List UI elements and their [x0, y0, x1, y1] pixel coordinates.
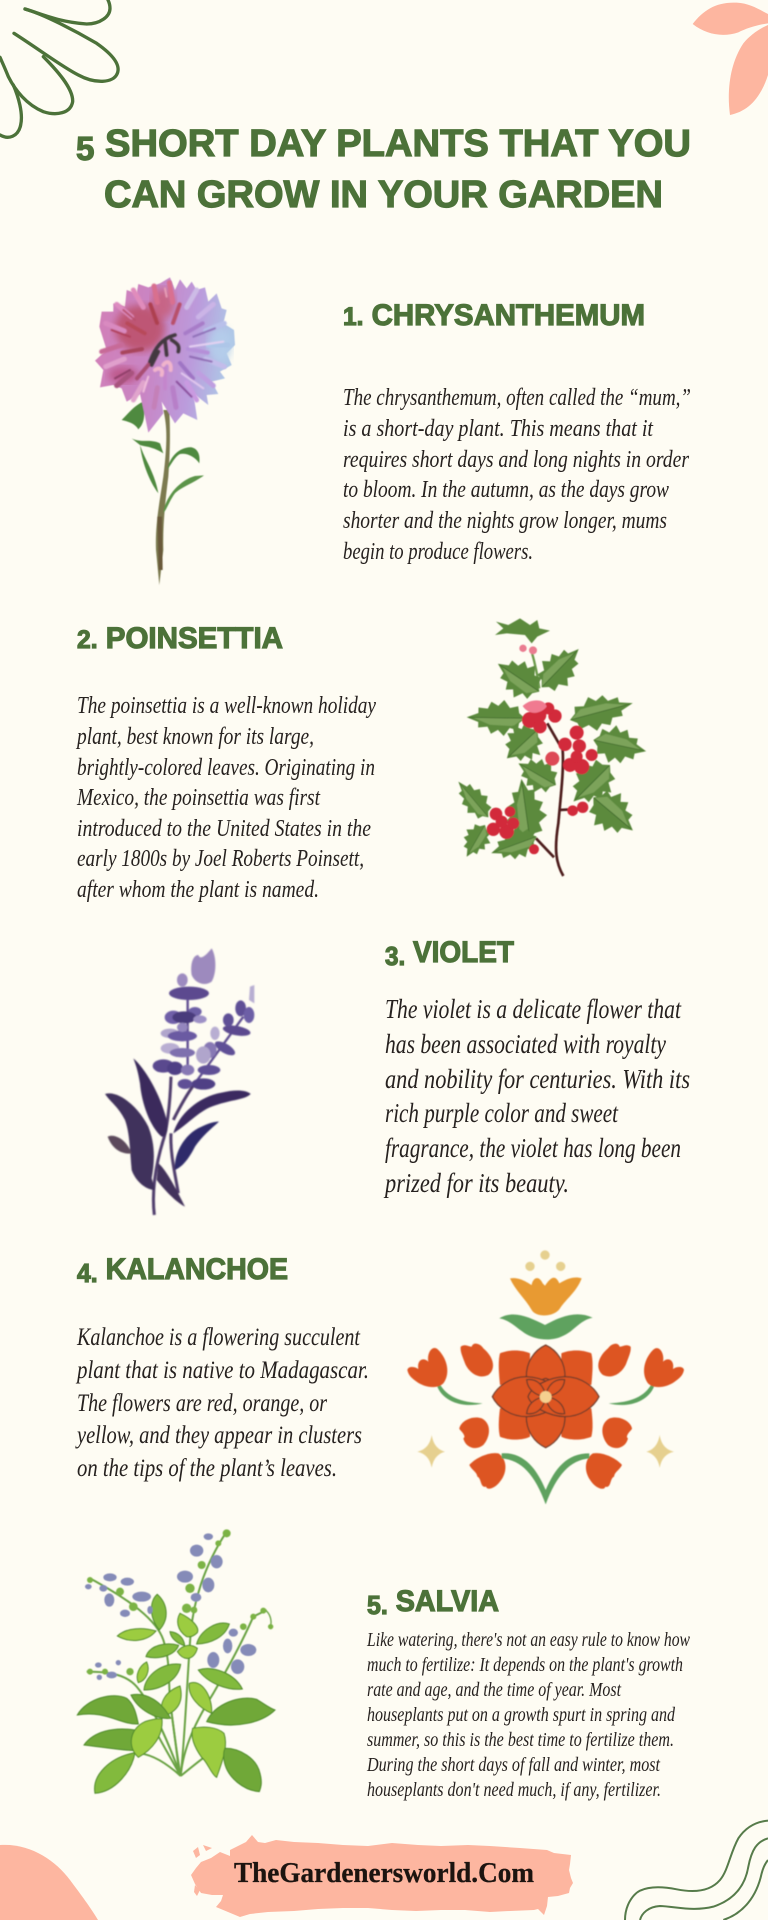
decoration: peach petals, top right — [693, 3, 768, 115]
text block: houseplants don't need much, if any, fertilizer. — [367, 1780, 661, 1801]
text block: to bloom. In the autumn, as the days grow — [343, 477, 669, 503]
text block: requires short days and long nights in order — [343, 447, 690, 473]
text block: brightly-colored leaves. Originating in — [77, 755, 375, 781]
text block — [343, 385, 691, 565]
text block: During the short days of fall and winter, most — [366, 1755, 660, 1776]
text block: fragrance, the violet has long been — [385, 1133, 681, 1163]
text block: Kalanchoe is a flowering succulent — [76, 1322, 361, 1351]
text block: and nobility for centuries. With its — [385, 1064, 690, 1094]
text block: early 1800s by Joel Roberts Poinsett, — [77, 846, 364, 872]
decoration: green petal outlines, top left — [0, 0, 118, 137]
brush stroke — [191, 1835, 573, 1917]
text block — [383, 994, 690, 1198]
heading: 4. — [77, 1258, 98, 1288]
text block: yellow, and they appear in clusters — [75, 1420, 362, 1449]
panel: violet — [105, 936, 690, 1215]
text block: plant that is native to Madagascar. — [75, 1355, 369, 1384]
heading: 1. CHRYSANTHEMUM — [343, 299, 645, 332]
footer banner — [191, 1835, 573, 1917]
title: CAN GROW IN YOUR GARDEN — [104, 174, 663, 216]
text block: rate and age, and the time of year. Most — [367, 1680, 621, 1701]
decoration: green wavy lines, bottom right — [625, 1821, 768, 1920]
illustration: folk art flower — [407, 1250, 684, 1504]
illustration: holly branch — [448, 618, 650, 876]
title: SHORT DAY PLANTS THAT YOU — [94, 123, 691, 165]
text block: The flowers are red, orange, or — [77, 1388, 327, 1417]
decoration: peach blob, bottom left — [0, 1845, 98, 1920]
heading: 2. POINSETTIA — [77, 622, 283, 655]
text block: begin to produce flowers. — [343, 539, 533, 565]
panel: poinsettia — [75, 618, 650, 903]
text block: after whom the plant is named. — [77, 877, 319, 903]
heading: SALVIA — [388, 1585, 499, 1618]
panel: chrysanthemum — [95, 277, 691, 585]
text block — [75, 693, 376, 903]
text block: prized for its beauty. — [383, 1168, 569, 1198]
heading: KALANCHOE — [98, 1253, 288, 1286]
text block: shorter and the nights grow longer, mums — [343, 508, 667, 534]
text block: Mexico, the poinsettia was first — [76, 785, 321, 811]
heading: VIOLET — [405, 936, 514, 969]
text block: is a short-day plant. This means that it — [343, 416, 654, 442]
panel: kalanchoe — [75, 1250, 684, 1504]
text block: has been associated with royalty — [385, 1029, 666, 1059]
text block: Like watering, there's not an easy rule to know how — [366, 1630, 690, 1651]
text block — [366, 1630, 690, 1801]
text block: The poinsettia is a well-known holiday — [77, 693, 376, 719]
text block: houseplants put on a growth spurt in spring and — [367, 1705, 675, 1726]
illustration: lavender sprig — [105, 948, 254, 1215]
website name: TheGardenersworld.Com — [234, 1857, 534, 1889]
title — [76, 123, 691, 216]
text block: rich purple color and sweet — [385, 1098, 619, 1128]
title: 5 — [76, 130, 94, 167]
text block: much to fertilize: It depends on the plant's growth — [367, 1655, 683, 1676]
heading: 5. — [367, 1590, 388, 1620]
illustration: salvia plant — [77, 1529, 275, 1793]
text block: The violet is a delicate flower that — [385, 994, 682, 1024]
illustration: chrysanthemum flower — [95, 277, 235, 585]
text block: summer, so this is the best time to fertilize them. — [367, 1730, 674, 1751]
text block: on the tips of the plant’s leaves. — [77, 1453, 337, 1482]
heading: 3. — [385, 941, 405, 971]
text block — [75, 1322, 369, 1482]
text block: plant, best known for its large, — [75, 724, 314, 750]
text block: introduced to the United States in the — [77, 816, 371, 842]
panel: salvia — [77, 1529, 690, 1801]
